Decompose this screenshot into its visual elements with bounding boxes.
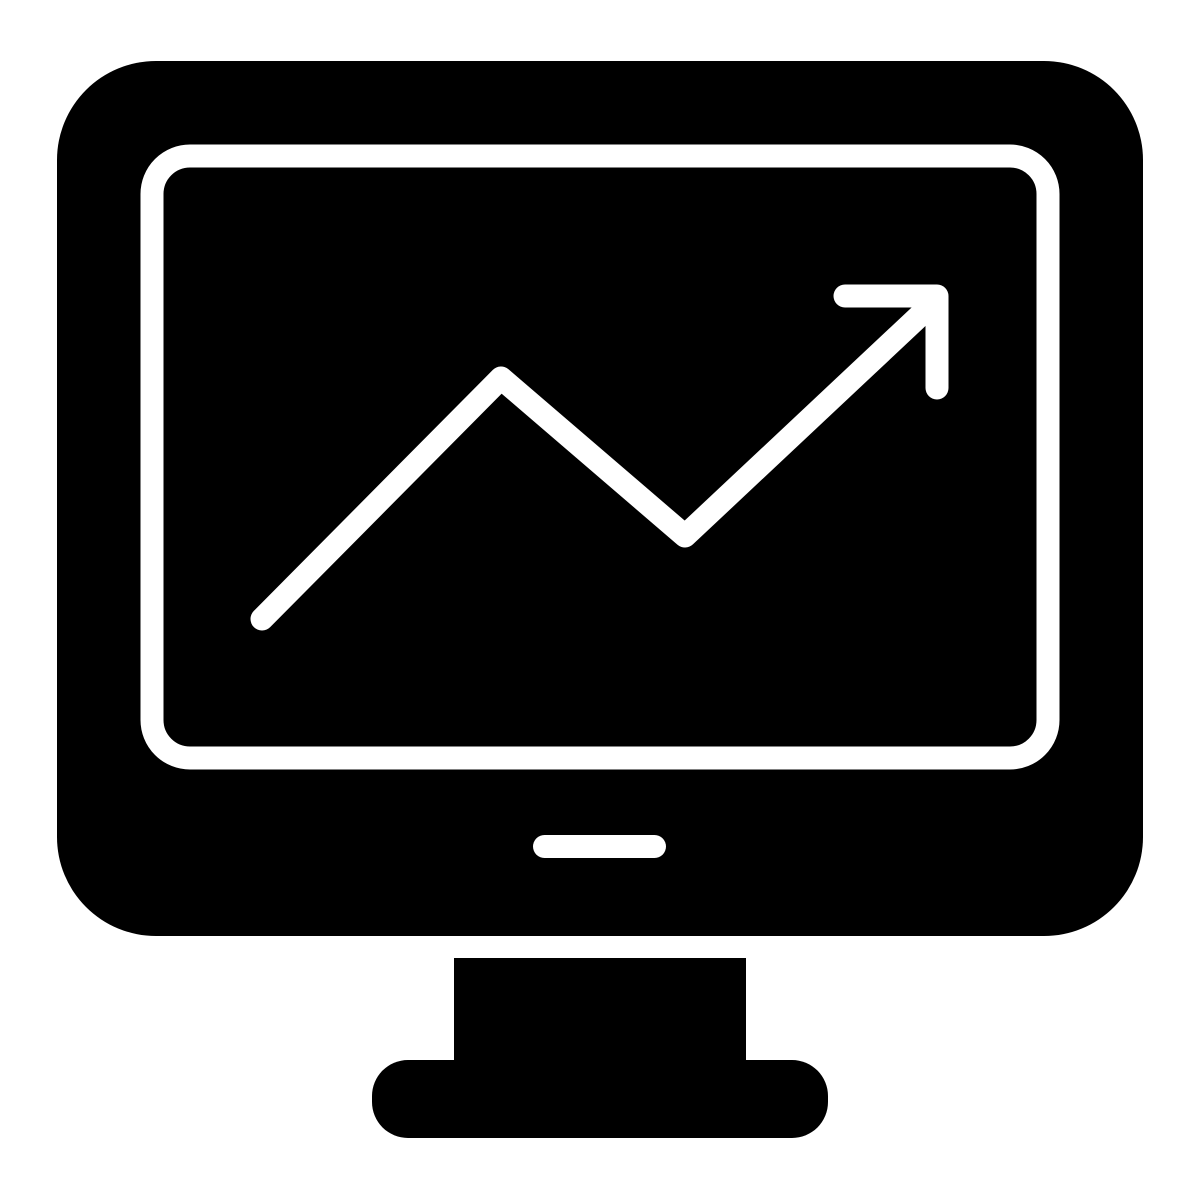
screen outline [152,156,1048,758]
monitor body [57,61,1143,936]
monitor stand neck [454,958,746,1068]
arrow head [845,296,937,388]
rising chart line with arrow [262,296,937,619]
power button [533,835,666,858]
monitor stand base [372,1060,828,1138]
chart line [262,306,930,619]
